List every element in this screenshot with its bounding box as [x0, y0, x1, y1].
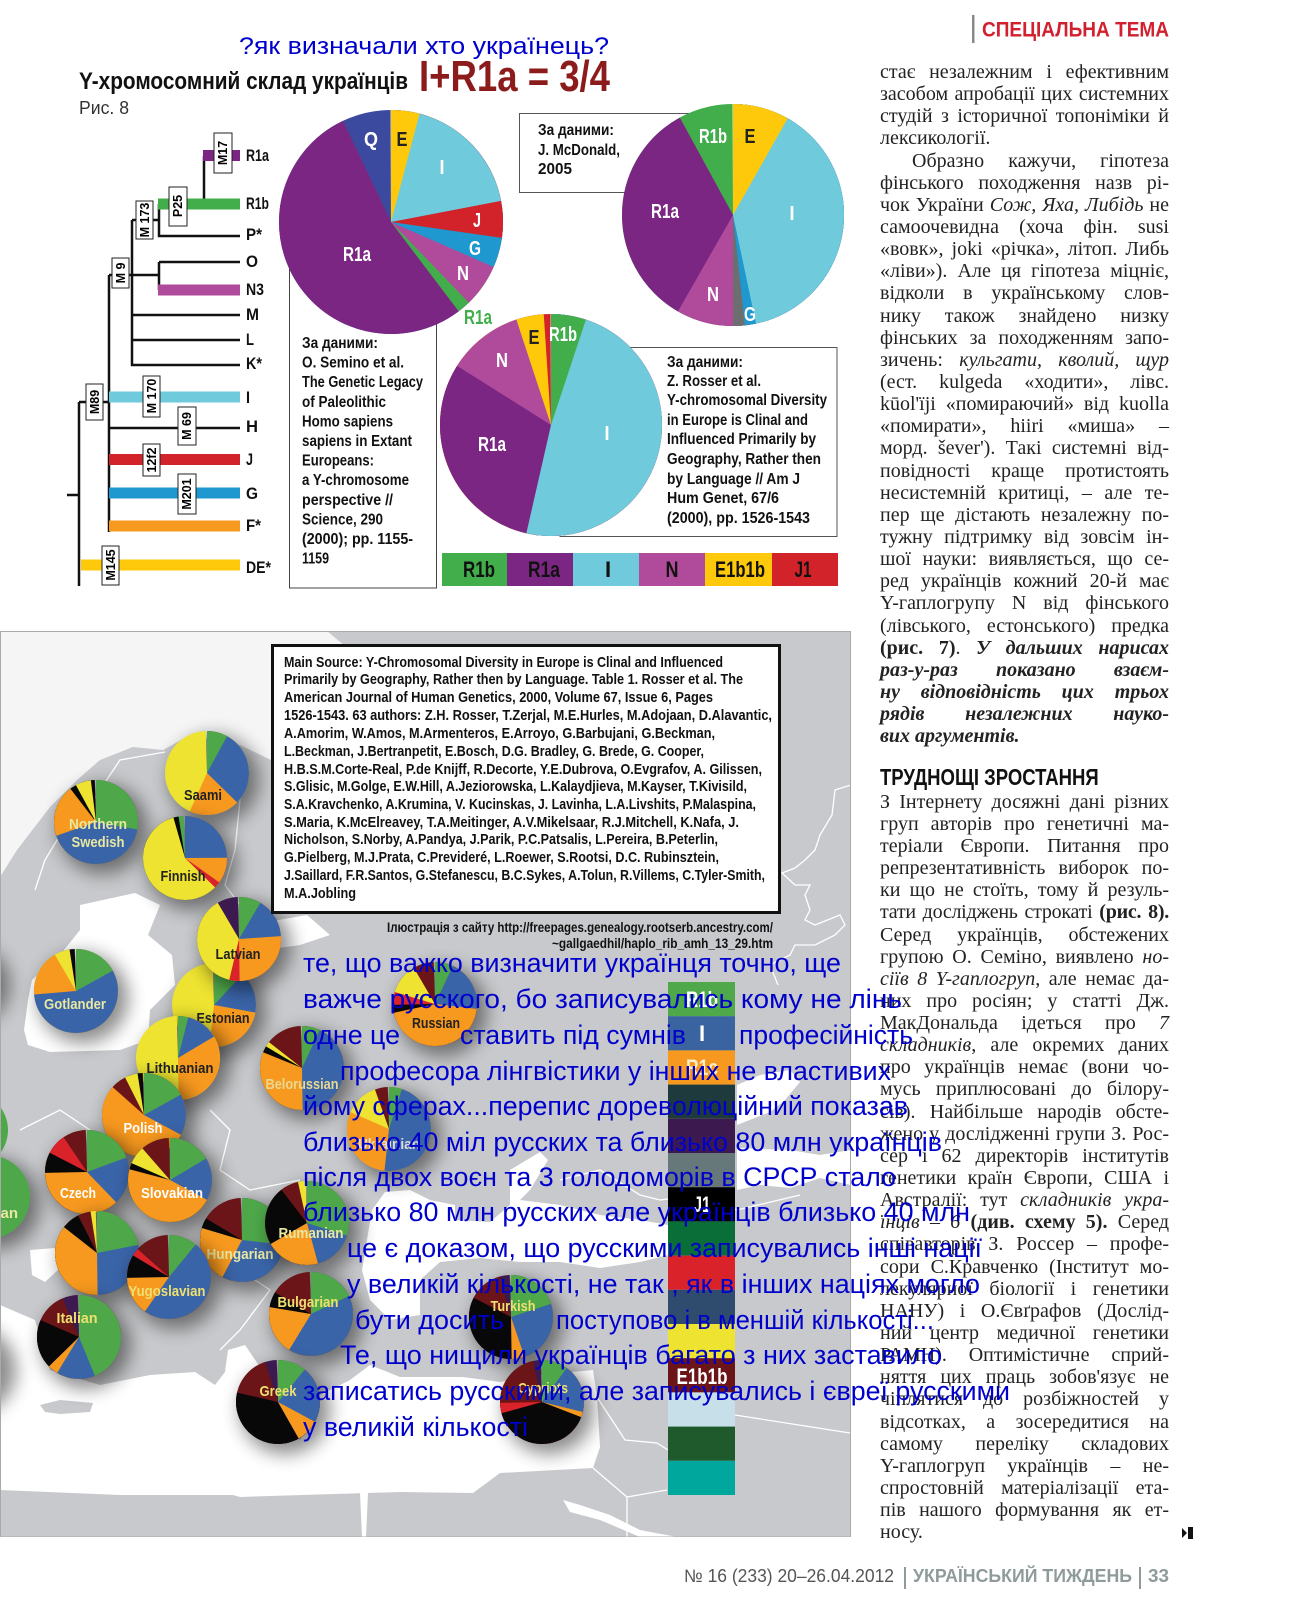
- citation box: Rosser: Geography, Rather then: [667, 451, 821, 468]
- article text column: (ест. kulgeda «ходити», лівс.: [880, 371, 1169, 393]
- citation box: Rosser: За даними:: [667, 354, 743, 371]
- source text box: Nicholson, S.Norby, A.Pandya, J.Parik, P.C.Patsalis, L.Pereira, B.Peterlin,: [284, 832, 718, 848]
- article text column: «ліви»). Але ця гіпотеза міцніє,: [880, 260, 1169, 282]
- article text column: групою О. Семіно, виявлено но-: [880, 946, 1169, 968]
- map: Alps bright patch: [30, 1248, 58, 1282]
- illustration credit: [387, 920, 773, 951]
- blue overlaid commentary: близько 80 млн русских але українців близько 40 млн: [303, 1197, 970, 1227]
- section header: СПЕЦІАЛЬНА ТЕМА: [982, 18, 1169, 42]
- article text column: рядів незалежних науко-: [880, 703, 1169, 725]
- pie chart: Semino data: I: [440, 157, 444, 179]
- citation box: Rosser: in Europe is Clinal and: [667, 412, 808, 429]
- article text column: їнців – 6 (див. схему 5). Серед: [880, 1211, 1169, 1233]
- article text column: шої науки: виявляється, що се-: [880, 548, 1169, 570]
- article text column: носу.: [880, 1521, 923, 1543]
- blue overlaid commentary: те, що важко визначити українця точно, ще: [303, 948, 841, 978]
- pie chart: Rosser data: R1b: [549, 324, 577, 346]
- tree branch labels: I: [246, 388, 250, 407]
- article text column: пів нашого формування як ет-: [880, 1499, 1169, 1521]
- source text box: American Journal of Human Genetics, 2000, Volume 67, Issue 6, Pages: [284, 690, 713, 706]
- article text column: ний центр медичної генетики: [880, 1322, 1169, 1344]
- tree branch labels: M: [246, 305, 259, 324]
- citation box: Semino: [290, 260, 436, 588]
- article text column: засобом апробації цих системних: [880, 83, 1169, 105]
- pie: Slovakian: [132, 1142, 222, 1232]
- article text column: няття цих праць зобов'язує не: [880, 1366, 1169, 1388]
- pie chart: Rosser data: [478, 324, 610, 480]
- pie chart: Semino data: [335, 129, 481, 285]
- pie chart: McDonald data: G: [744, 304, 756, 326]
- article text column: складників, але окремих даних: [880, 1034, 1169, 1056]
- mutation marker boxes: M 173: [138, 203, 152, 237]
- map: Black Sea: [362, 1152, 668, 1320]
- colour legend strip: [442, 553, 838, 586]
- pie: Northern Swedish: [58, 784, 148, 874]
- citation box: McDonald: 2005: [538, 161, 572, 178]
- haplogroup tree diagram: [67, 133, 271, 586]
- article text column: Австралії: тут складників укра-: [880, 1189, 1169, 1211]
- blue overlaid commentary: поступово і в меншій кількості...: [556, 1305, 934, 1335]
- pie: Yugoslavian: [128, 1239, 221, 1329]
- pie chart: Rosser data: I: [604, 423, 610, 445]
- map: Mediterranean: [0, 1305, 600, 1497]
- article text column: мусь приплюсовані до білору-: [880, 1078, 1169, 1100]
- haplogroup colour legend column: R1c: [686, 1055, 718, 1080]
- mutation marker boxes: M17: [216, 141, 230, 165]
- mutation marker boxes: M89: [88, 390, 102, 414]
- article text column: пер ще дістають незалежну по-: [880, 504, 1169, 526]
- figure label: Рис. 8: [79, 98, 129, 118]
- source text box: L.Beckman, J.Bertranpetit, E.Bosch, D.G. Bradley, G. Brede, G. Cooper,: [284, 744, 704, 760]
- article text column: Y-гаплогруп українців – не-: [880, 1455, 1169, 1477]
- map: Baltic sea: [24, 893, 175, 1052]
- map: Gulf of Finland: [277, 915, 330, 948]
- colour legend strip: J1: [794, 557, 812, 582]
- citation box: Rosser: [560, 348, 837, 536]
- tree branch labels: [246, 146, 271, 577]
- pie chart: Rosser data: E: [528, 327, 540, 349]
- blue overlaid commentary: у великій кількості: [303, 1412, 528, 1442]
- mutation marker boxes: M 170: [145, 379, 159, 413]
- chart title: Y-хромосомний склад українців: [79, 68, 408, 95]
- map: libyan landmass gap: [360, 1493, 368, 1537]
- pie: Latvian: Latvian: [216, 946, 260, 963]
- pie: Saami: Saami: [184, 787, 222, 804]
- pie: Belorussian: [264, 1030, 354, 1120]
- article text column: Образно кажучи, гіпотеза: [912, 150, 1169, 172]
- citation box: Rosser: Hum Genet, 67/6: [667, 490, 779, 507]
- source text box: J.Saillard, F.R.Santos, G.Stefanescu, B.C.Sykes, A.Tolun, R.Villems, C.Tyler-Smith,: [284, 868, 765, 884]
- article text column: сори С.Кравченко (Інститут мо-: [880, 1256, 1169, 1278]
- pie: Yugoslavian: Yugoslavian: [128, 1283, 206, 1300]
- pie: Russian: Russian: [412, 1015, 460, 1032]
- tree branch labels: F*: [246, 516, 261, 535]
- blue overlaid commentary: ставить під сумнів: [460, 1020, 686, 1050]
- article text column: відколи в українському слов-: [880, 282, 1169, 304]
- pie: Turkish: [473, 1279, 563, 1369]
- mutation marker boxes: M 9: [114, 263, 128, 283]
- article text column: сів). Найбільше народів обсте-: [880, 1101, 1169, 1123]
- blue overlaid commentary: близько 40 міл русских та близько 80 млн українців: [303, 1127, 942, 1157]
- article text column: [878, 61, 1170, 1543]
- article text column: Серед українців, обстежених: [880, 924, 1169, 946]
- pie: Latvian: [201, 901, 291, 991]
- source text box: H.B.S.M.Corte-Real, P.de Knijff, R.Decorte, Y.E.Dubrova, O.Evgrafov, A. Gilissen,: [284, 762, 762, 778]
- pie: Italian: [41, 1299, 131, 1389]
- pie: Hungarian: Hungarian: [206, 1246, 274, 1263]
- pie: Greek: Greek: [260, 1383, 297, 1400]
- tree branch labels: O: [246, 252, 258, 271]
- pie chart: Semino data: N: [457, 263, 469, 285]
- citation box: Semino: 1159: [302, 551, 329, 568]
- article text column: тужну підтримку від зовсім ін-: [880, 526, 1169, 548]
- article text column: РАМН). Оптимістичне сприй-: [880, 1344, 1169, 1366]
- citation box: Semino: a Y-chromosome: [302, 472, 409, 489]
- article text column: груп авторів про генетичні ма-: [880, 813, 1169, 835]
- tree branch labels: R1a: [246, 146, 269, 165]
- pie chart: McDonald data: R1a: [651, 201, 680, 223]
- pie: Finnish: [147, 820, 237, 910]
- pie: Finnish: Finnish: [160, 868, 206, 885]
- map: Caspian south: [737, 1148, 851, 1190]
- pie chart: McDonald data: I: [790, 203, 794, 225]
- pie chart: Rosser data: R1a: [478, 434, 507, 456]
- article text column: МакДональда ідеться про 7: [880, 1012, 1169, 1034]
- article text column: вих аргументів.: [880, 725, 1020, 747]
- mutation marker boxes: [86, 133, 232, 585]
- citation box: Semino: Homo sapiens: [302, 413, 393, 430]
- citation box: Semino: Science, 290: [302, 511, 383, 528]
- citation box: Semino: sapiens in Extant: [302, 433, 412, 450]
- blue overlaid commentary: професійність: [739, 1020, 913, 1050]
- pie: Cypriots: [504, 1364, 594, 1454]
- citation box: Rosser: by Language // Am J: [667, 471, 800, 488]
- blue overlaid commentary: важче русского, бо записувались кому не лінь: [303, 984, 902, 1014]
- colour legend strip: E1b1b: [715, 557, 765, 582]
- pie: Gotlander: Gotlander: [44, 996, 106, 1013]
- pie chart: Semino data: R1a: [343, 244, 372, 266]
- article text column: Y-гаплогрупу N від фінського: [880, 592, 1169, 614]
- colour legend strip: I: [605, 557, 611, 582]
- article text column: стає незалежним і ефективним: [880, 61, 1169, 83]
- pie chart: Semino data: G: [469, 238, 481, 260]
- pie: Slovakian: Slovakian: [141, 1185, 203, 1202]
- article text column: морд. šever'). Такі системні від-: [880, 437, 1169, 459]
- source text box: 1526-1543. 63 authors: Z.H. Rosser, T.Zerjal, M.E.Hurles, M.Adojaan, D.Alavantic,: [284, 708, 772, 724]
- citation box: Rosser: Influenced Primarily by: [667, 431, 816, 448]
- blue overlaid commentary: йому сферах...перепис дореволюційний показав: [303, 1091, 908, 1121]
- haplogroup colour legend column: [668, 982, 735, 1495]
- article text column: чок України Сож, Яха, Либідь не: [880, 194, 1169, 216]
- article text column: студій з історичної топоніміки й: [880, 105, 1169, 127]
- blue overlaid commentary: записатись русскими, але записувались і євреї русскими: [303, 1376, 1010, 1406]
- article text column: теріали Європи. Питання про: [880, 835, 1169, 857]
- tree branch labels: G: [246, 484, 258, 503]
- article text column: нику також знайдено низку: [880, 305, 1169, 327]
- map: northern sea: [0, 631, 345, 877]
- map: Sicily island: [40, 1400, 93, 1414]
- article text column: зичень: кульгати, кволий, щур: [880, 349, 1169, 371]
- footer: УКРАЇНСЬКИЙ ТИЖДЕНЬ: [913, 1565, 1132, 1586]
- article text column: раз-у-раз показано взаєм-: [880, 659, 1169, 681]
- pie chart: Semino data: J: [473, 210, 481, 232]
- mutation marker boxes: M145: [104, 549, 118, 581]
- mutation marker boxes: M201: [180, 478, 194, 510]
- end mark: [1182, 1527, 1193, 1539]
- footer: [684, 1565, 1169, 1589]
- source text box: Main Source: Y-Chromosomal Diversity in Europe is Clinal and Influenced: [284, 655, 723, 671]
- pie: Polish: Polish: [124, 1120, 162, 1137]
- haplogroup colour legend column: J1: [694, 1192, 710, 1217]
- article text column: генетики країн Європи, США і: [880, 1167, 1169, 1189]
- haplogroup colour legend column: E1b1b: [676, 1364, 728, 1389]
- haplogroup colour legend column: I: [699, 1021, 705, 1046]
- source text box: S.A.Kravchenko, A.Krumina, V. Kucinskas, J. Lavinha, L.A.Livshits, P.Malaspina,: [284, 797, 756, 813]
- pie: Ukrainian: [351, 1091, 441, 1181]
- tree branch labels: H: [246, 417, 258, 436]
- map: Red Sea: [563, 1500, 677, 1537]
- article text column: лекулярної біології і генетики: [880, 1278, 1169, 1300]
- tree branch labels: DE*: [246, 558, 271, 577]
- article text column: kūol'ïji «помираючий» від kuolla: [880, 393, 1169, 415]
- pie chart: McDonald data: [651, 126, 794, 326]
- pie: Czech: [49, 1134, 139, 1224]
- pie: Northern Swedish: Swedish: [72, 834, 124, 851]
- footer: № 16 (233) 20–26.04.2012: [684, 1566, 894, 1586]
- pie chart: McDonald data: E: [744, 126, 756, 148]
- citation box: Semino: perspective //: [302, 492, 394, 509]
- article text column: (рис. 7). У дальших нарисах: [880, 637, 1169, 659]
- pie: Polish: [106, 1077, 196, 1167]
- article text column: тати досліджень строкаті (рис. 8).: [880, 901, 1169, 923]
- citation box: Semino: The Genetic Legacy: [302, 374, 423, 391]
- pie: Czech: Czech: [60, 1185, 96, 1202]
- citation box: Semino: (2000); pp. 1155-: [302, 531, 413, 548]
- source text box: G.Pielberg, M.J.Prata, C.Previderé, L.Roewer, S.Rootsi, D.C. Rubinsztein,: [284, 850, 719, 866]
- pie: Saami: [169, 735, 259, 825]
- article text column: репрезентативність виборок по-: [880, 857, 1169, 879]
- blue overlaid commentary: професора лінгвістики у інших не властивих: [340, 1056, 891, 1086]
- pie: Bulgarian: Bulgarian: [278, 1294, 338, 1311]
- green R1a label: R1a: [464, 307, 493, 329]
- red formula headline: I+R1a = 3/4: [419, 52, 610, 101]
- pie chart: McDonald data: R1b: [699, 126, 727, 148]
- article text column: про українців немає (вони чо-: [880, 1056, 1169, 1078]
- pie: Northern Swedish: Northern: [69, 816, 127, 833]
- article text column: ред українців кожний 20-й має: [880, 570, 1169, 592]
- illustration credit: ~gallgaedhil/haplo_rib_amh_13_29.htm: [552, 936, 773, 951]
- mutation marker boxes: 12f2: [145, 447, 159, 473]
- pie: Lithuanian: [140, 1020, 230, 1110]
- article text column: (лівського, естонського) предка: [880, 615, 1169, 637]
- article text column: «помирати», hiiri «миша» –: [880, 415, 1169, 437]
- citation box: Semino: За даними:: [302, 335, 378, 352]
- pie: Estonian: Estonian: [196, 1010, 250, 1027]
- pie chart: Semino data: E: [396, 129, 408, 151]
- article text column: ТРУДНОЩІ ЗРОСТАННЯ: [880, 764, 1099, 790]
- article text column: сер і 62 директорів інститутів: [880, 1145, 1169, 1167]
- map: Caspian north: [737, 1070, 800, 1125]
- citation box: McDonald: [520, 114, 704, 192]
- pie: Turkish: Turkish: [490, 1298, 536, 1315]
- citation box: Rosser: Z. Rosser et al.: [667, 373, 761, 390]
- colour legend strip: R1b: [463, 557, 495, 582]
- left edge pies: [0, 945, 40, 1414]
- blue overlaid commentary: бути досить: [355, 1305, 504, 1335]
- article text column: ки що не стоїть, тому й резуль-: [880, 879, 1169, 901]
- article text column: спростовній матеріалізації ета-: [880, 1477, 1169, 1499]
- tree branch labels: R1b: [246, 194, 269, 213]
- article text column: З Інтернету досяжні дані різних: [880, 791, 1169, 813]
- citation box: Semino: of Paleolithic: [302, 394, 386, 411]
- blue overlaid commentary: у великій кількості, не так , як в інших націях могло: [347, 1269, 980, 1299]
- citation box: Semino: Europeans:: [302, 453, 374, 470]
- tree branch labels: P*: [246, 225, 262, 244]
- citation box: Rosser: (2000), pp. 1526-1543: [667, 510, 810, 527]
- article text column: жено у дослідженні групи З. Рос-: [880, 1123, 1169, 1145]
- article text column: чіплятися до розбіжностей у: [880, 1388, 1169, 1410]
- article text column: повідності краще протистоять: [880, 460, 1169, 482]
- pie: Rumanian: Rumanian: [278, 1225, 344, 1242]
- article text column: самоочевидна (хоча фін. susi: [880, 216, 1169, 238]
- source text box: Primarily by Geography, Rather then by Language. Table 1. Rosser et al. The: [284, 672, 743, 688]
- illustration credit: Ілюстрація з сайту http://freepages.genealogy.rootserb.ancestry.com/: [387, 920, 773, 935]
- blue question heading: ?як визначали хто українець?: [239, 33, 609, 60]
- tree branch labels: J: [246, 450, 253, 469]
- source text box: M.A.Jobling: [284, 886, 356, 902]
- mutation marker boxes: M 69: [180, 412, 194, 440]
- pie: Hungarian: [204, 1202, 294, 1292]
- blue overlaid commentary: це є доказом, що русскими записувались інші нації: [347, 1233, 982, 1263]
- pie: Greek: [240, 1364, 330, 1454]
- pie: Ukrainian: Ukrainian: [358, 1136, 420, 1153]
- source text box: [272, 646, 780, 912]
- source text box: S.Maria, K.McElreavey, T.A.Meitinger, A.V.Mikelsaar, R.J.Mitchell, K.Nafa, J.: [284, 815, 739, 831]
- pie: Gotlander: [38, 953, 128, 1043]
- article text column: них про росіян; у статті Дж.: [880, 990, 1169, 1012]
- article text column: відсотках, а зосередитися на: [880, 1411, 1169, 1433]
- article text column: «вовк», joki «річка», літоп. Либь: [880, 238, 1169, 260]
- article text column: лексикології.: [880, 127, 990, 149]
- citation box: McDonald: За даними:: [538, 122, 614, 139]
- colour legend strip: N: [666, 557, 678, 582]
- pie chart: Semino data: Q: [364, 129, 378, 151]
- article text column: самому переліку складових: [880, 1433, 1169, 1455]
- citation box: McDonald: J. McDonald,: [538, 142, 620, 159]
- blue overlaid commentary: одне це: [303, 1020, 400, 1050]
- haplogroup colour legend column: R1b: [686, 987, 718, 1012]
- pie: Rumanian: [269, 1185, 359, 1275]
- article text column: НАНУ) і О.Євґрафов (Дослід-: [880, 1300, 1169, 1322]
- pie: Italian: Italian: [56, 1310, 98, 1327]
- pie: Cypriots: Cypriots: [518, 1380, 568, 1397]
- pie: Estonian: [176, 967, 266, 1057]
- pie: Russian: [397, 966, 487, 1056]
- article text column: сіїв 8 Y-гаплогруп, але немає да-: [880, 968, 1169, 990]
- tree branch labels: N3: [246, 280, 264, 299]
- citation box: Rosser: Y-chromosomal Diversity: [667, 392, 827, 409]
- article text column: співавторів З. Россер – профе-: [880, 1233, 1169, 1255]
- footer: 33: [1148, 1566, 1169, 1586]
- blue overlaid commentary: після двох воєн та 3 голодоморів в СРСР стало: [303, 1162, 896, 1192]
- article text column: фінських за походженням запо-: [880, 327, 1169, 349]
- colour legend strip: R1a: [528, 557, 561, 582]
- pie chart: Rosser data: N: [496, 350, 508, 372]
- article text column: несистемній критиці, – але те-: [880, 482, 1169, 504]
- tree branch labels: K*: [246, 354, 262, 373]
- pie: Bulgarian: [273, 1276, 363, 1366]
- tree branch labels: L: [246, 330, 254, 349]
- pie: Lithuanian: Lithuanian: [146, 1060, 214, 1077]
- pie: Austrian area (unlabelled): [59, 1215, 149, 1305]
- article text column: ну відповідність цих трьох: [880, 681, 1169, 703]
- article text column: фінського походження назв рі-: [880, 172, 1169, 194]
- blue overlaid commentary: Те, що нищили українців багато з них заставило: [340, 1340, 942, 1370]
- citation box: Semino: O. Semino et al.: [302, 355, 404, 372]
- panel: Europe haplogroup map: [0, 631, 851, 1537]
- pie: Belorussian: Belorussian: [266, 1076, 338, 1093]
- pie chart: McDonald data: N: [707, 284, 719, 306]
- mutation marker boxes: P25: [171, 195, 185, 217]
- source text box: A.Amorim, W.Amos, M.Armenteros, E.Arroyo, G.Barbujani, G.Beckman,: [284, 726, 715, 742]
- source text box: S.Glisic, M.Golge, E.W.Hill, A.Jeziorowska, L.Kalaydjieva, M.Kayser, T.Kivisild,: [284, 779, 747, 795]
